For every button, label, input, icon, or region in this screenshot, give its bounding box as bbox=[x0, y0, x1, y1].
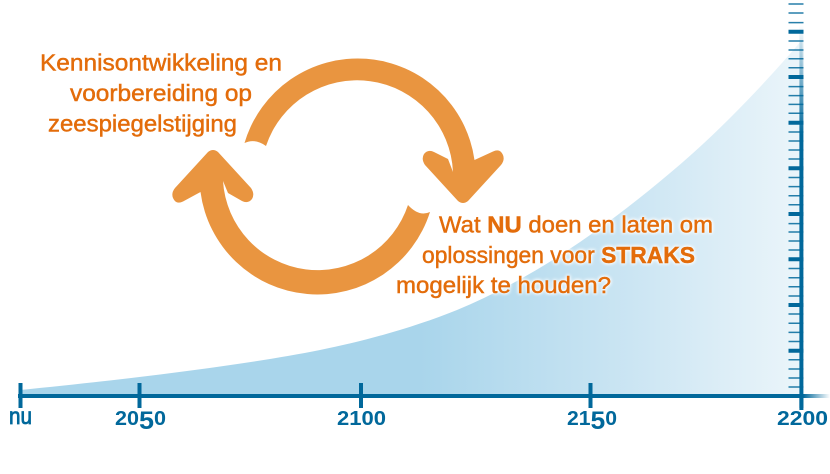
text: knowledge development bbox=[40, 50, 282, 136]
cycle arrows bbox=[172, 58, 504, 294]
axis labels bbox=[9, 403, 828, 435]
text: knowledge development: zeespiegelstijging bbox=[48, 110, 237, 136]
text: knowledge development: voorbereiding op bbox=[70, 80, 252, 106]
text: what to do now: oplossingen voor STRAKS bbox=[422, 242, 695, 268]
axis labels: 20 bbox=[115, 408, 137, 430]
axis labels: nu bbox=[9, 403, 32, 429]
timeline axis bbox=[18, 383, 830, 408]
axis labels: 5 bbox=[591, 407, 605, 435]
axis labels: 21 bbox=[567, 408, 589, 430]
axis labels: 2100 bbox=[337, 408, 386, 430]
text: what to do now bbox=[396, 212, 713, 298]
vertical scale bbox=[788, 4, 804, 410]
axis labels: 0 bbox=[154, 408, 166, 430]
text: knowledge development: Kennisontwikkeling en bbox=[40, 50, 282, 76]
axis labels: 5 bbox=[139, 407, 154, 435]
text: what to do now: mogelijk te houden? bbox=[396, 272, 611, 298]
axis labels: 0 bbox=[605, 408, 617, 430]
sea level rise area bbox=[20, 40, 802, 396]
text: what to do now: Wat NU doen en laten om bbox=[439, 212, 713, 238]
axis labels: 2200 bbox=[777, 408, 828, 430]
arrow: bottom clockwise bbox=[172, 150, 430, 294]
arrow: top clockwise bbox=[244, 58, 504, 203]
